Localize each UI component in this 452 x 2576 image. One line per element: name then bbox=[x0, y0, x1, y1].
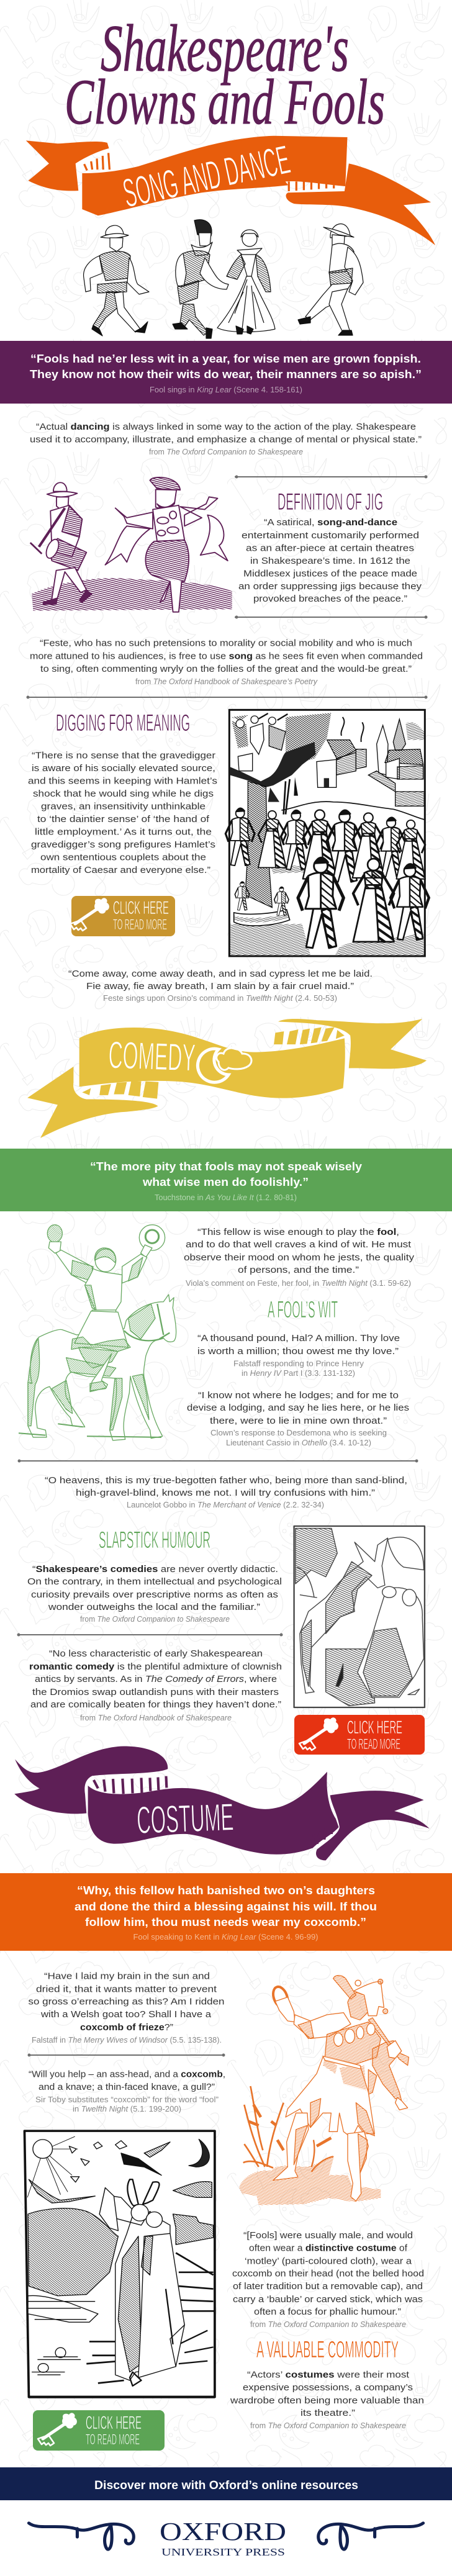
illustration: donkey woodcut bbox=[294, 1526, 425, 1707]
quote band: purple bbox=[0, 341, 452, 404]
quote band: purple: Fool sings in King Lear (Scene 4. 158-161) bbox=[150, 386, 302, 394]
text block: O heavens bbox=[45, 1475, 407, 1509]
text block: Feste sings: “Come away, come away death, and in sad cypress let me be laid. bbox=[68, 969, 373, 979]
text block: Feste sings bbox=[68, 969, 373, 1003]
panel: digging for meaning: little employment.’ As it turns out, the bbox=[35, 827, 212, 837]
text block: romantic comedy: the Dromios swap outlandish puns with their masters bbox=[32, 1687, 279, 1697]
text block: wise enough: Viola’s comment on Feste, her fool, in Twelfth Night (3.1. 59-62) bbox=[186, 1279, 411, 1288]
text block: Feste quote bbox=[30, 638, 423, 686]
text block: romantic comedy: “No less characteristic of early Shakespearean bbox=[49, 1648, 263, 1659]
panel: slapstick humour bbox=[27, 1527, 282, 1624]
panel: definition of jig: an order suppressing jigs because they bbox=[238, 581, 422, 592]
button: click here green: CLICK HERE bbox=[86, 2413, 142, 2433]
text block: Feste sings: Fie away, fie away breath, I am slain by a fair cruel maid.” bbox=[86, 981, 354, 992]
quote band: green bbox=[0, 1149, 452, 1211]
panel: digging for meaning: mortality of Caesar and everyone else.” bbox=[31, 865, 210, 875]
title bbox=[65, 12, 385, 138]
illustration: piper and jig dancer bbox=[30, 477, 232, 612]
panel: digging for meaning: DIGGING FOR MEANING bbox=[56, 710, 190, 736]
panel: digging for meaning: graves, an insensitivity unthinkable bbox=[41, 801, 206, 812]
footer band: Discover more with Oxford’s online resources bbox=[94, 2479, 358, 2492]
text block: fools costume: of later tradition but a removable cap), and bbox=[233, 2281, 423, 2292]
panel: definition of jig bbox=[235, 476, 427, 618]
panel: slapstick humour: “Shakespeare’s comedies are never overtly didactic. bbox=[32, 1564, 278, 1575]
panel: a valuable commodity: “Actors’ costumes were their most bbox=[247, 2369, 410, 2380]
icon: moon and cloud bbox=[197, 1048, 251, 1082]
panel: a fool's wit: in Henry IV Part I (3.3. 131-132) bbox=[242, 1369, 355, 1378]
panel: definition of jig: entertainment customarily performed bbox=[242, 530, 419, 541]
quote band: orange: “Why, this fellow hath banished two on’s daughters bbox=[77, 1884, 375, 1897]
text block: Falstaff quote: coxcomb of frieze ?” bbox=[80, 2022, 173, 2033]
button: click here red bbox=[294, 1715, 425, 1755]
text block: Sir Toby quote: “Will you help – an ass-head, and a coxcomb, bbox=[29, 2069, 225, 2080]
panel: a fool's wit bbox=[187, 1297, 409, 1447]
text block: Falstaff quote: “Have I laid my brain in the sun and bbox=[44, 1971, 210, 1982]
panel: a fool's wit: devise a lodging, and say he lies here, or he lies bbox=[187, 1403, 409, 1413]
illustration: dancers bbox=[84, 220, 363, 338]
footer white ground bbox=[0, 2500, 452, 2576]
text block: wise enough: of persons, and the time.” bbox=[238, 1265, 359, 1275]
text block: wise enough: observe their mood on whom he jests, the quality bbox=[184, 1252, 415, 1263]
panel: definition of jig: in Shakespeare’s time. In 1612 the bbox=[250, 556, 410, 566]
text block: fools costume: often wear a distinctive costume of bbox=[249, 2243, 408, 2254]
panel: definition of jig: provoked breaches of the peace.” bbox=[253, 594, 407, 604]
text block: Sir Toby quote bbox=[29, 2069, 225, 2113]
text block: Sir Toby quote: in Twelfth Night (5.1. 199-200) bbox=[73, 2105, 181, 2113]
panel: a fool's wit: there, were to lie in mine own throat.” bbox=[210, 1416, 387, 1426]
panel: slapstick humour: SLAPSTICK HUMOUR bbox=[99, 1527, 210, 1553]
illustration: village dance woodcut bbox=[225, 710, 429, 956]
text block: fools costume: ‘motley’ (parti-coloured cloth), wear a bbox=[245, 2256, 412, 2266]
text block: fools costume bbox=[232, 2230, 424, 2329]
banner: song and dance bbox=[26, 136, 435, 245]
panel: digging for meaning: own sententious couplets about the bbox=[40, 852, 206, 863]
panel: a fool's wit: Clown’s response to Desdemona who is seeking bbox=[210, 1429, 387, 1437]
text block: Falstaff quote: Falstaff in The Merry Wives of Windsor (5.5. 135-138). bbox=[32, 2036, 222, 2045]
panel: a valuable commodity bbox=[230, 2337, 424, 2430]
panel: slapstick humour: On the contrary, in them intellectual and psychological bbox=[27, 1576, 282, 1587]
text block: romantic comedy: antics by servants. As in The Comedy of Errors , where bbox=[35, 1674, 277, 1684]
text block: dancing quote: from The Oxford Companion to Shakespeare bbox=[149, 448, 303, 456]
text block: romantic comedy bbox=[29, 1648, 282, 1722]
quote band: green: “The more pity that fools may not speak wisely bbox=[90, 1160, 363, 1173]
text block: wise enough bbox=[184, 1227, 415, 1288]
text block: Falstaff quote: so gross o’erreaching as this? Am I ridden bbox=[29, 1997, 225, 2007]
illustration: fool on horse bbox=[19, 1225, 176, 1440]
panel: digging for meaning: to ‘the daintier sense’ of ‘the hand of bbox=[37, 814, 210, 825]
button: click here gold: TO READ MORE bbox=[113, 916, 167, 933]
panel: a valuable commodity: its theatre.” bbox=[301, 2408, 355, 2418]
banner text: COSTUME bbox=[136, 1796, 234, 1842]
quote band: green: what wise men do foolishly.” bbox=[142, 1175, 309, 1188]
panel: a fool's wit: Lieutenant Cassio in Othello (3.4. 10-12) bbox=[226, 1439, 371, 1447]
button: click here green bbox=[33, 2410, 165, 2451]
quote band: orange bbox=[0, 1873, 452, 1951]
panel: digging for meaning: is aware of his socially elevated source, bbox=[32, 763, 215, 774]
panel: definition of jig: “A satirical, song-and-dance bbox=[264, 517, 397, 528]
panel: a valuable commodity: expensive possessions, a company’s bbox=[243, 2382, 413, 2393]
banner: comedy bbox=[27, 1019, 427, 1138]
quote band: orange: Fool speaking to Kent in King Lear (Scene 4. 96-99) bbox=[133, 1933, 318, 1941]
text block: dancing quote: used it to accompany, illustrate, and emphasize a change of mental or physical state.” bbox=[30, 435, 422, 445]
text block: Feste sings: Feste sings upon Orsino’s command in Twelfth Night (2.4. 50-53) bbox=[103, 994, 337, 1003]
logo: Oxford University Press: OXFORD bbox=[160, 2517, 286, 2546]
text block: Falstaff quote: with a Welsh goat too? Shall I have a bbox=[40, 2009, 212, 2020]
illustration: jester woodcut orange bbox=[239, 1976, 409, 2205]
panel: a valuable commodity: wardrobe often being more valuable than bbox=[230, 2395, 424, 2406]
panel: definition of jig: Middlesex justices of the peace made bbox=[243, 569, 417, 579]
quote band: orange: follow him, thou must needs wear my coxcomb.” bbox=[85, 1915, 366, 1928]
text block: Feste quote: more attuned to his audiences, is free to use song as he sees fit even when commanded bbox=[30, 651, 423, 662]
text block: Sir Toby quote: Sir Toby substitutes “coxcomb” for the word “fool” bbox=[35, 2095, 219, 2104]
text block: romantic comedy: and are comically beaten for things they haven’t done.” bbox=[30, 1699, 281, 1710]
text block: fools costume: often a focus for phallic humour.” bbox=[254, 2307, 401, 2317]
footer band bbox=[0, 2467, 452, 2500]
quote band: purple: They know not how their wits do wear, their manners are so apish.” bbox=[30, 368, 422, 381]
text block: Falstaff quote: dried it, that it wants matter to prevent bbox=[36, 1984, 217, 1994]
logo: Oxford University Press bbox=[29, 2517, 423, 2558]
text block: romantic comedy: romantic comedy is the plentiful admixture of clownish bbox=[29, 1661, 282, 1672]
text block: Sir Toby quote: and a knave; a thin-faced knave, a gull?” bbox=[38, 2082, 215, 2092]
banner text: COMEDY bbox=[108, 1034, 196, 1080]
panel: a valuable commodity: from The Oxford Companion to Shakespeare bbox=[250, 2421, 406, 2430]
text block: O heavens: Launcelot Gobbo in The Merchant of Venice (2.2. 32-34) bbox=[127, 1501, 324, 1509]
text block: dancing quote bbox=[30, 422, 422, 456]
panel: slapstick humour: from The Oxford Companion to Shakespeare bbox=[80, 1615, 230, 1624]
text block: fools costume: “[Fools] were usually male, and would bbox=[243, 2230, 413, 2241]
text block: Feste quote: to sing, often commenting wryly on the follies of the great and the would-be great.” bbox=[40, 664, 412, 674]
panel: slapstick humour: wonder outweighs the local and the familiar.” bbox=[48, 1602, 260, 1612]
panel: digging for meaning: and this seems in keeping with Hamlet’s bbox=[28, 776, 217, 786]
button: click here gold bbox=[70, 896, 175, 936]
text block: fools costume: carry a ‘bauble’ or carved stick, which was bbox=[233, 2294, 423, 2305]
button: click here gold: CLICK HERE bbox=[113, 898, 169, 918]
illustration: fool and woman woodcut bbox=[24, 2131, 215, 2397]
text block: Feste quote: from The Oxford Handbook of Shakespeare’s Poetry bbox=[135, 677, 318, 686]
text block: O heavens: “O heavens, this is my true-begotten father who, being more than sand-blind, bbox=[45, 1475, 407, 1486]
panel: digging for meaning: gravedigger’s song prefigures Hamlet’s bbox=[31, 839, 215, 850]
panel: a fool's wit: is worth a million; thou owest me thy love.” bbox=[197, 1346, 399, 1357]
quote band: green: Touchstone in As You Like It (1.2. 80-81) bbox=[155, 1193, 297, 1202]
text block: Feste quote: “Feste, who has no such pretensions to morality or social mobility and who is much bbox=[40, 638, 412, 648]
panel: definition of jig: as an after-piece at certain theatres bbox=[246, 543, 414, 554]
text block: romantic comedy: from The Oxford Handbook of Shakespeare bbox=[80, 1714, 232, 1722]
button: click here green: TO READ MORE bbox=[86, 2431, 140, 2448]
panel: digging for meaning: shock that he would sing while he digs bbox=[33, 789, 214, 799]
panel: slapstick humour: curiosity prevails over prescriptive norms as often as bbox=[31, 1589, 278, 1600]
panel: a fool's wit: A FOOL’S WIT bbox=[268, 1297, 338, 1323]
text block: Falstaff quote bbox=[29, 1971, 225, 2045]
banner: costume bbox=[14, 1746, 430, 1860]
panel: digging for meaning bbox=[28, 710, 217, 875]
text block: wise enough: “This fellow is wise enough to play the fool, bbox=[197, 1227, 399, 1237]
text block: O heavens: high-gravel-blind, knows me not. I will try confusions with him.” bbox=[76, 1488, 375, 1498]
text block: wise enough: and to do that well craves a kind of wit. He must bbox=[186, 1239, 412, 1250]
panel: a fool's wit: “A thousand pound, Hal? A million. Thy love bbox=[197, 1333, 400, 1344]
quote band: purple: “Fools had ne’er less wit in a year, for wise men are grown foppish. bbox=[30, 352, 421, 365]
panel: digging for meaning: “There is no sense that the gravedigger bbox=[32, 750, 215, 761]
logo: Oxford University Press: UNIVERSITY PRESS bbox=[161, 2546, 285, 2558]
text block: fools costume: from The Oxford Companion to Shakespeare bbox=[250, 2320, 406, 2329]
panel: a fool's wit: “I know not where he lodges; and for me to bbox=[198, 1390, 399, 1401]
panel: a fool's wit: Falstaff responding to Prince Henry bbox=[233, 1360, 364, 1368]
quote band: orange: and done the third a blessing against his will. If thou bbox=[75, 1900, 377, 1913]
text block: dancing quote: “Actual dancing is always linked in some way to the action of the play. Shakespeare bbox=[36, 422, 416, 432]
text block: fools costume: coxcomb on their head (not the belled hood bbox=[232, 2269, 424, 2279]
